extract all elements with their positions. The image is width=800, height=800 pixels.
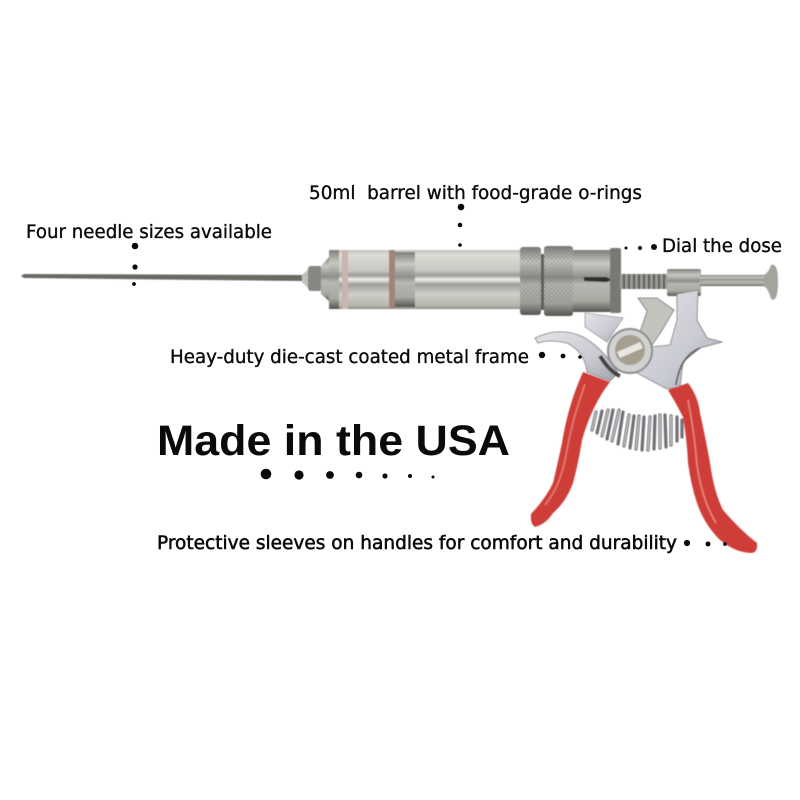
handles label: Protective sleeves on handles for comfort and durability	[157, 532, 677, 554]
needle label	[26, 221, 272, 286]
barrel label	[309, 182, 642, 247]
made in the USA heading: Made in the USA	[157, 417, 510, 465]
barrel	[329, 250, 521, 309]
spring	[592, 410, 682, 450]
left red handle	[531, 372, 610, 527]
needle label: Four needle sizes available	[26, 221, 272, 243]
metal frame	[535, 290, 722, 389]
frame label: Heay-duty die-cast coated metal frame	[170, 346, 529, 368]
barrel label: 50ml barrel with food-grade o-rings	[309, 182, 642, 204]
needle hub	[302, 256, 330, 302]
knurled collars	[520, 246, 621, 316]
dial label: Dial the dose	[662, 235, 782, 257]
injector photo illustration	[21, 246, 778, 553]
needle	[21, 274, 307, 281]
threaded dial rod and plunger	[620, 265, 778, 300]
right red handle	[668, 383, 757, 553]
